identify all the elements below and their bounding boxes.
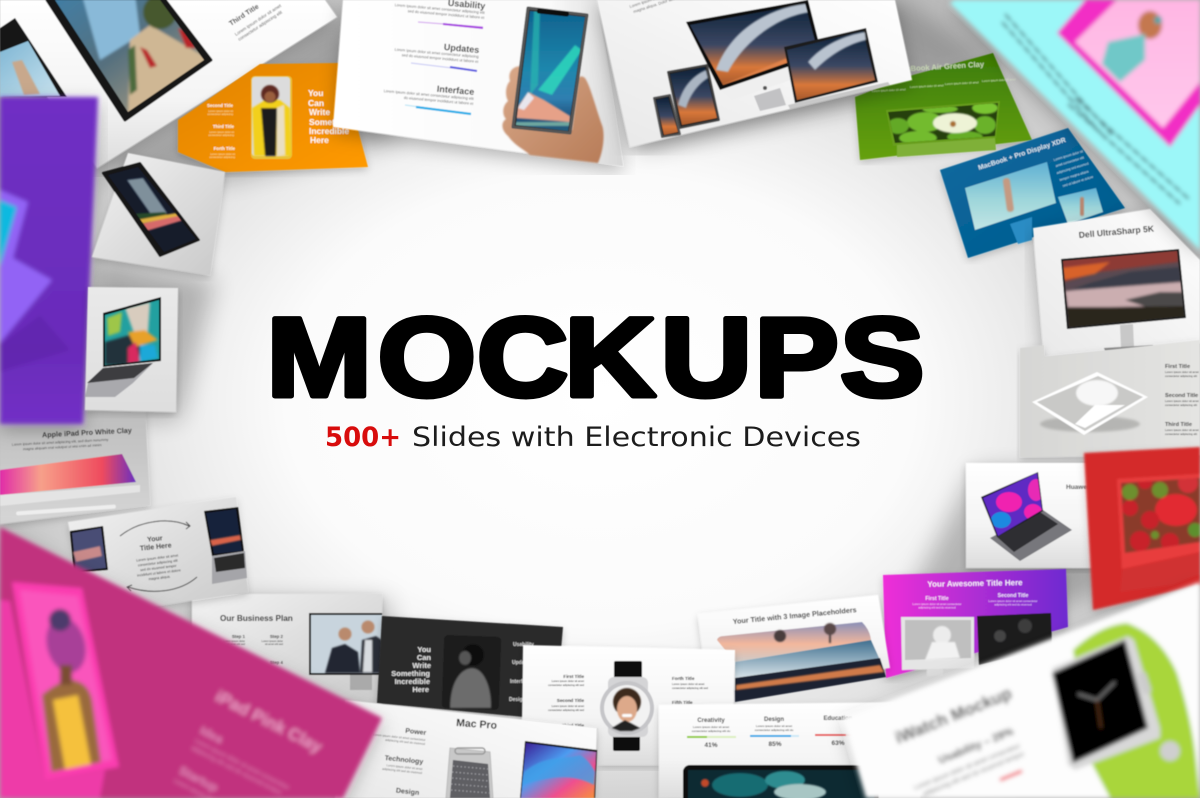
text: technology block: Lorem ipsum dolor sit amet <box>386 763 423 771</box>
text: usability percent: Usability – 29% <box>937 726 1016 767</box>
heading: Your Title Here: Title Here <box>140 542 172 553</box>
bar: updates <box>411 63 477 71</box>
icon: iPhone small <box>654 95 680 137</box>
panel: business plan slide <box>192 594 382 710</box>
text: steps: sit amet elit sed <box>265 642 284 646</box>
text: steps: Lorem ipsum dolor <box>224 639 245 643</box>
text: iPad lorem: magna aliquam erat volutpat ut wisi enim ad minim <box>23 443 102 451</box>
icon: pink iPad with woman <box>0 582 119 798</box>
panel: dark You Can Write slide <box>377 616 563 720</box>
text: blue paragraph: adipiscing sed eiusmod <box>1056 161 1089 175</box>
icon: black phone <box>103 163 199 256</box>
text: updates block: sed do eiusmod tempor incididunt ut labore et <box>402 53 479 64</box>
text: watch left list: Lorem ipsum dolor sit amet <box>552 679 584 683</box>
bar: usability <box>418 22 483 28</box>
text: watch left list: Third Title <box>562 723 584 728</box>
text: first title: First Title <box>1165 364 1190 370</box>
subtitle: 500+ Slides with Electronic Devices: Slides with Electronic Devices <box>412 422 861 453</box>
text: orange heading: You <box>308 88 323 98</box>
text: lorem lines: Lorem ipsum dolor sit amet <box>234 3 283 37</box>
text: design block <box>755 717 794 748</box>
text: watch right list: consectetur adipiscing elit sed <box>672 686 708 690</box>
text: second title: Second Title <box>1165 393 1198 399</box>
text: dark heading: Incredible <box>395 677 430 686</box>
bar: creativity <box>687 736 736 738</box>
text: orange list: Second Title <box>207 103 234 108</box>
text: orange lorem: consectetur adipiscing <box>207 112 234 116</box>
text: orange heading: Incredible <box>309 126 349 136</box>
image: three stacked pictures <box>717 622 886 702</box>
text: orange list: Third Title <box>213 124 235 129</box>
text: dark heading: Write <box>412 661 431 670</box>
text: first title: Lorem ipsum dolor sit amet consectetur <box>913 602 962 606</box>
text: steps: Step 4 <box>270 660 284 665</box>
panel: 3 image placeholders slide <box>698 595 890 702</box>
text: blue paragraph: Lorem ipsum dolor sit <box>1053 149 1084 162</box>
heading: MacBook Air Green Clay: MacBook Air Green Clay <box>896 60 985 74</box>
heading: iWatch Mockup: iWatch Mockup <box>892 684 1015 748</box>
panel: phone card slide <box>92 153 225 275</box>
bar: usability <box>1000 771 1022 780</box>
panel: Apple iPad Pro White Clay slide <box>0 410 150 524</box>
text: steps <box>224 634 284 665</box>
panel: pink iPad slide <box>0 527 382 798</box>
text: updates block: Updates <box>443 42 480 55</box>
text: second title: Lorem ipsum dolor sit amet <box>1165 399 1199 403</box>
text: technology block: adipiscing elit sed do eiusmod <box>382 767 423 775</box>
text: watch left list <box>548 674 584 728</box>
text: third title: Third Title <box>228 3 260 28</box>
text: green columns: Lorem ipsum dolor sit amet <box>872 87 906 93</box>
text: dark lines on cyan <box>1002 14 1190 204</box>
text: steps: Step 1 <box>232 634 246 639</box>
panel: cyan slide <box>950 0 1200 250</box>
text: first title: First Title <box>925 596 949 602</box>
text: idea block: Lorem ipsum dolor sit amet consectetur <box>194 738 290 791</box>
text: updates block <box>394 38 481 64</box>
text: dark right list: Interface <box>510 679 531 685</box>
panel: Huawei slide <box>966 463 1093 568</box>
icon: tablet with white-haired figure <box>1032 372 1148 435</box>
icon: iPad with painted screen <box>0 454 140 515</box>
text: usability block: sed do eiusmod tempor incididunt ut labore et <box>408 9 485 20</box>
text: design block: consectetur adipiscing elit do <box>755 728 794 732</box>
heading: iPad Pink Clay: iPad Pink Clay <box>212 687 326 757</box>
panel: top left white tablet slide <box>0 0 337 168</box>
text: design block: Design <box>396 788 420 797</box>
image: beach photo small <box>1058 188 1103 224</box>
panel: orange slide <box>178 63 368 172</box>
text: steps: Step 2 <box>270 634 284 639</box>
text: orange lorem: Lorem ipsum dolor sit <box>209 130 234 134</box>
text: second title: Lorem ipsum dolor sit amet consectetur <box>989 599 1038 603</box>
text: orange heading: Here <box>310 135 329 145</box>
bar: design <box>750 735 799 737</box>
text: cycle lorem: sed do eiusmod tempor <box>140 564 178 572</box>
text: education block: 63% <box>831 740 845 747</box>
text: watch right list: Fifth Title <box>672 700 693 705</box>
text: design block: Design <box>764 717 784 723</box>
heading: Our Business Plan: Our Business Plan <box>220 614 293 623</box>
icon: laptop <box>981 472 1072 561</box>
icon: phone with woman in yellow <box>251 76 292 159</box>
image: green apples <box>886 101 1000 157</box>
text: watch right list: Lorem ipsum dolor sit amet <box>672 682 705 686</box>
text: creativity block <box>692 718 731 749</box>
panel: green MacBook Air slide <box>855 53 1032 160</box>
panel: red monitor slide <box>1084 447 1200 610</box>
text: first title: adipiscing elit sed do eiusmod <box>918 606 956 610</box>
text: watch right list: Forth Title <box>672 676 695 681</box>
subtitle: 500+ Slides with Electronic Devices: 500+ <box>325 422 401 453</box>
bar: education <box>815 734 864 736</box>
text: iPad lorem <box>12 438 109 452</box>
text: blue paragraph: sed ut labore et dolore <box>1062 175 1094 188</box>
icon: pink device with woman <box>1057 0 1200 147</box>
text: idea block: adipiscing elit sed do eiusmod tempor <box>190 745 282 796</box>
icon: iPad <box>668 65 719 128</box>
text: blue paragraph: amet consectetur elit <box>1055 155 1085 168</box>
arrow: top curved <box>120 521 190 536</box>
text: dark right list: Design <box>509 697 526 703</box>
text: creativity block: Creativity <box>697 718 725 724</box>
panel: Mac Pro slide <box>335 700 597 798</box>
text: power block <box>373 725 427 746</box>
image: woman in black and white <box>442 635 501 710</box>
text: first title <box>1165 364 1199 378</box>
icon: red monitor with strawberries <box>1117 474 1200 569</box>
text: green columns: Lorem ipsum dolor sit amet <box>910 83 944 89</box>
text: startup block <box>173 763 277 798</box>
text: watch left list: Second Title <box>557 698 584 703</box>
text: first title: Lorem ipsum dolor sit amet <box>1165 370 1199 374</box>
panel: iPhone slide <box>333 0 623 166</box>
panel: magenta Awesome Title slide <box>883 569 1068 678</box>
icon: iMac <box>686 0 826 111</box>
text: second title: consectetur adipiscing elit <box>1165 403 1197 407</box>
text: third title <box>1165 422 1199 436</box>
text: watch left list: consectetur adipiscing elit sed <box>548 708 584 712</box>
text: orange lorem: consectetur adipiscing <box>209 155 236 159</box>
text: orange heading: Can <box>308 98 324 108</box>
text: design block: Lorem ipsum dolor sit amet <box>756 724 792 728</box>
heading: Your Awesome Title Here: Your Awesome Title Here <box>927 578 1023 589</box>
heading: Dell UltraSharp 5K: Dell UltraSharp 5K <box>1078 223 1155 240</box>
text: technology block: Technology <box>384 755 424 766</box>
panel: Apple devices slide <box>597 0 912 147</box>
text: watch lorem: adipiscing elit sed do eiusmod tempor <box>922 750 1026 798</box>
text: second title <box>989 593 1038 606</box>
text: third title: Lorem ipsum dolor sit amet <box>1165 428 1199 432</box>
arrow: bottom curved <box>127 577 197 591</box>
text: second title: adipiscing elit sed do eiusmod <box>994 602 1032 606</box>
soft shadows around the collage <box>85 0 1100 720</box>
text: dark heading: Here <box>412 685 429 694</box>
heading: Your Title with 3 Image Placeholders: Your Title with 3 Image Placeholders <box>732 605 857 626</box>
text: watch left list: Lorem ipsum dolor sit amet <box>552 704 584 708</box>
text: blue paragraph: tempor magna aliqua <box>1059 169 1089 182</box>
icon: dark monitor <box>977 613 1052 665</box>
text: green columns: Lorem ipsum dolor sit amet <box>982 77 1016 83</box>
text: orange list: Forth Title <box>214 146 236 151</box>
heading: MacBook + Pro Display XDR: MacBook + Pro Display XDR <box>977 137 1067 172</box>
text: green columns: Lorem ipsum dolor sit amet <box>945 80 979 86</box>
panel: blue MacBook + Pro Display XDR slide <box>940 128 1125 258</box>
text: watch left list: First Title <box>563 674 584 679</box>
text: first title <box>913 596 962 610</box>
text: dark heading: Can <box>417 653 431 662</box>
panel: laptop card slide <box>85 287 178 412</box>
text: cycle lorem <box>135 553 182 583</box>
icon: monitor <box>1060 249 1188 351</box>
text: cycle lorem: consectetur adipiscing elit <box>138 559 178 567</box>
text: dark right list: Updates <box>512 660 532 666</box>
text: green columns <box>872 77 1016 93</box>
text: third title: consectetur adipiscing elit <box>1165 432 1197 436</box>
panel: Your Title Here slide <box>68 497 248 612</box>
icon: Mac Pro tower <box>446 748 493 798</box>
text: dark heading: You <box>417 645 431 654</box>
text: orange lorem <box>207 109 236 159</box>
text: steps: Lorem ipsum dolor <box>262 639 283 643</box>
text: interface block: Interface <box>436 84 475 97</box>
text: updates block: Lorem ipsum dolor sit amet consectetur adipiscing <box>394 48 479 59</box>
shape: display stand <box>1010 217 1032 244</box>
icon: hand holding phone <box>502 5 604 163</box>
text: Huawei title: Huawei <box>1066 484 1089 491</box>
panel: Creativity Design Education slide <box>659 702 920 798</box>
text: first title: consectetur adipiscing elit <box>1165 374 1197 378</box>
text: orange heading: Write <box>309 107 330 117</box>
text: usability block <box>394 0 487 20</box>
image: colorful wave screen <box>520 741 597 798</box>
text: watch right list <box>672 676 708 705</box>
icon: apple watch with green band <box>1052 623 1200 798</box>
heading: Mac Pro: Mac Pro <box>456 717 497 732</box>
text: watch lorem: Lorem ipsum dolor sit amet consectetur <box>913 742 1022 792</box>
panel: iWatch mockup slide <box>843 582 1200 798</box>
text: second title: Second Title <box>998 593 1028 599</box>
icon: small phone at corner <box>0 18 67 97</box>
panel: Dell UltraSharp slide <box>1033 209 1200 357</box>
panel: grey tablet slide <box>1020 340 1200 457</box>
icon: monitor with two men <box>309 613 382 690</box>
title: MOCKUPS: MOCKUPS <box>266 296 924 420</box>
image: beach photo large <box>965 162 1056 230</box>
heading: Apple iPad Pro White Clay: Apple iPad Pro White Clay <box>42 426 132 439</box>
text: education block: Education <box>823 716 853 722</box>
text: blue paragraph <box>1053 149 1094 188</box>
text: power block: adipiscing elit sed do eiusmod <box>385 738 426 746</box>
text: technology block <box>382 755 424 775</box>
icon: tablet with dark teal art <box>683 765 879 798</box>
icon: MacBook with colourful screen <box>85 295 162 397</box>
panel: purple slide <box>0 97 98 424</box>
text: dark right list: Usability <box>513 642 534 648</box>
text: iPad lorem: Lorem ipsum dolor sit amet adipiscing elit, sed diam nonummy <box>12 438 109 447</box>
text: usability block: Lorem ipsum dolor sit amet consectetur adipiscing elit <box>394 3 486 15</box>
text: cycle lorem: magna aliqua. <box>148 575 171 581</box>
text: lorem lines: consectetur adipiscing elit <box>237 9 284 42</box>
text: interface block: do eiusmod tempor incididunt ut labore et <box>404 96 474 106</box>
panel: watch slide <box>522 645 735 765</box>
text: orange lorem: consectetur adipiscing <box>208 133 235 137</box>
text: watch left list: consectetur adipiscing elit sed <box>548 683 584 687</box>
text: dark heading <box>391 645 431 694</box>
text: cycle lorem: Lorem ipsum dolor sit amet <box>136 553 178 563</box>
text: creativity block: 41% <box>704 742 718 749</box>
text: orange heading <box>308 88 353 145</box>
text: orange lorem: Lorem ipsum dolor sit <box>210 152 235 156</box>
icon: left tablet <box>70 526 108 573</box>
text: creativity block: consectetur adipiscing elit do <box>692 729 731 733</box>
text: dark right list <box>509 642 534 703</box>
text: cycle lorem: incididunt ut labore et dolore <box>137 568 181 578</box>
text: third title: Third Title <box>1165 422 1192 428</box>
icon: white monitor <box>901 617 974 676</box>
icon: MacBook <box>784 28 890 109</box>
text: steps: sit amet elit sed <box>227 642 246 646</box>
heading: Your Title Here: Your <box>147 535 163 544</box>
icon: right laptop <box>204 507 247 584</box>
text: design block: 85% <box>768 741 782 748</box>
icon: tablet with city photo <box>45 0 215 120</box>
text: orange list <box>207 103 236 151</box>
text: startup block: Startup <box>177 763 220 795</box>
text: second title <box>1165 393 1199 407</box>
text: idea block <box>190 723 298 798</box>
bar: interface <box>405 105 471 114</box>
text: creativity block: Lorem ipsum dolor sit amet <box>693 725 729 729</box>
icon: watch with portrait <box>600 661 654 751</box>
heading: Your Title Here <box>139 534 172 553</box>
text: education block <box>823 716 853 747</box>
text: dark heading: Something <box>391 669 430 678</box>
text: idea block: Idea <box>198 723 226 747</box>
text: orange heading: Something <box>309 117 353 127</box>
icon: lilac and cyan device <box>0 190 70 372</box>
text: power block: Lorem ipsum dolor sit amet consectetur <box>373 732 426 742</box>
text: interface block: Lorem ipsum dolor sit amet consectetur adipiscing elit <box>383 89 475 101</box>
text: orange lorem: Lorem ipsum dolor sit <box>208 109 233 113</box>
text: interface block <box>383 79 476 106</box>
text: power block: Power <box>405 728 427 737</box>
